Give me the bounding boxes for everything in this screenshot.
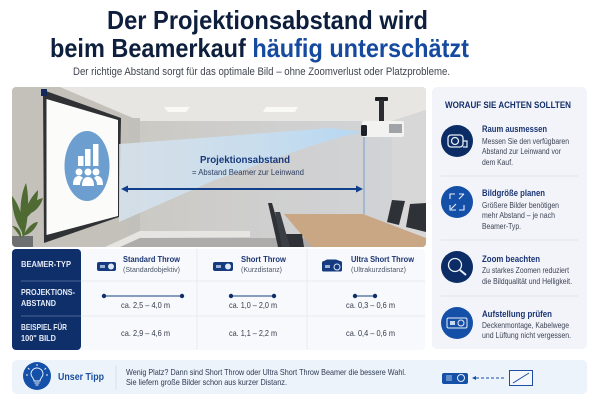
icon: audience chart on screen [64, 131, 110, 201]
row headers [12, 249, 81, 350]
tip text: Sie liefern große Bilder schon aus kurzer Distanz. [126, 377, 287, 387]
column: standard throw: (Standardobjektiv) [123, 265, 180, 274]
icon: light bulb [23, 362, 51, 390]
distance arrow [121, 186, 363, 192]
item: Zoom beachten: die Bildqualität und Helligkeit. [482, 277, 572, 286]
column: standard throw: ca. 2,9 – 4,6 m [121, 328, 170, 338]
row headers: BEAMER-TYP [21, 259, 71, 269]
column: short throw [213, 254, 286, 338]
light beam [119, 128, 363, 222]
column: ultra short throw: (Ultrakurzdistanz) [351, 265, 406, 274]
item: Aufstellung prüfen: Deckenmontage, Kabelwege [482, 321, 569, 330]
chairs [268, 200, 426, 247]
ceiling lights [164, 107, 298, 112]
item: Bildgröße planen: Bildgröße planen [482, 188, 545, 199]
projection screen [41, 89, 121, 243]
column: short throw: ca. 1,1 – 2,2 m [229, 328, 277, 338]
item: Raum ausmessen: Raum ausmessen [482, 124, 547, 135]
plant [12, 183, 43, 248]
panel: table [12, 249, 425, 350]
row headers: ABSTAND [21, 298, 56, 308]
column: short throw: ca. 1,0 – 2,0 m [229, 300, 277, 310]
tip text: Wenig Platz? Dann sind Short Throw oder Ultra Short Throw Beamer die bessere Wahl. [126, 367, 406, 377]
distance label [192, 156, 304, 175]
vertical guide line [364, 137, 365, 214]
item: Aufstellung prüfen [441, 307, 571, 340]
panel: room photo [12, 87, 426, 248]
item: Aufstellung prüfen: und Lüftung nicht vergessen. [482, 331, 571, 340]
distance label: Projektionsabstand [200, 154, 290, 166]
checklist heading: WORAUF SIE ACHTEN SOLLTEN [445, 100, 571, 110]
title: Der Projektionsabstand wird [107, 5, 428, 35]
row headers: BEISPIEL FÜR [21, 322, 67, 332]
item: Raum ausmessen [441, 124, 569, 167]
column: standard throw: Standard Throw [123, 254, 180, 264]
title: beim Beamerkauf häufig unterschätzt [50, 33, 469, 63]
column: ultra short throw: Ultra Short Throw [351, 254, 414, 264]
item: Zoom beachten [441, 251, 572, 286]
item: Bildgröße planen: Größere Bilder benötigen [482, 201, 559, 210]
item: Bildgröße planen: mehr Abstand – je nach [482, 211, 555, 220]
item: Zoom beachten: Zoom beachten [482, 254, 540, 265]
ceiling projector [361, 97, 404, 137]
panel: tip banner [12, 360, 587, 394]
column: standard throw: ca. 2,5 – 4,0 m [121, 300, 170, 310]
title [50, 5, 469, 63]
column: ultra short throw: ca. 0,3 – 0,6 m [346, 300, 395, 310]
column: short throw: Short Throw [241, 254, 286, 264]
conference table [284, 214, 426, 247]
item: Aufstellung prüfen: Aufstellung prüfen [482, 309, 552, 320]
item: Bildgröße planen: Beamer-Typ. [482, 222, 521, 231]
subtitle: Der richtige Abstand sorgt für das optimale Bild – ohne Zoomverlust oder Platzprobleme. [73, 66, 450, 78]
column: standard throw [97, 254, 184, 338]
distance label: = Abstand Beamer zur Leinwand [192, 168, 304, 177]
item: Raum ausmessen: Abstand zur Leinwand vor [482, 147, 561, 156]
item: Raum ausmessen: Messen Sie den verfügbaren [482, 137, 569, 146]
row headers: PROJEKTIONS- [21, 287, 75, 297]
icon: projector to screen [442, 370, 532, 386]
tip text [126, 367, 406, 387]
column: ultra short throw: ca. 0,4 – 0,6 m [346, 328, 395, 338]
panel: checklist [432, 87, 587, 349]
item: Raum ausmessen: dem Kauf. [482, 158, 513, 167]
row headers: 100" BILD [21, 333, 56, 343]
item: Zoom beachten: Zu starkes Zoomen reduziert [482, 266, 570, 275]
tip heading: Unser Tipp [58, 371, 104, 383]
column: short throw: (Kurzdistanz) [241, 265, 282, 274]
column: ultra short throw [322, 254, 414, 338]
item: Bildgröße planen [441, 186, 559, 231]
